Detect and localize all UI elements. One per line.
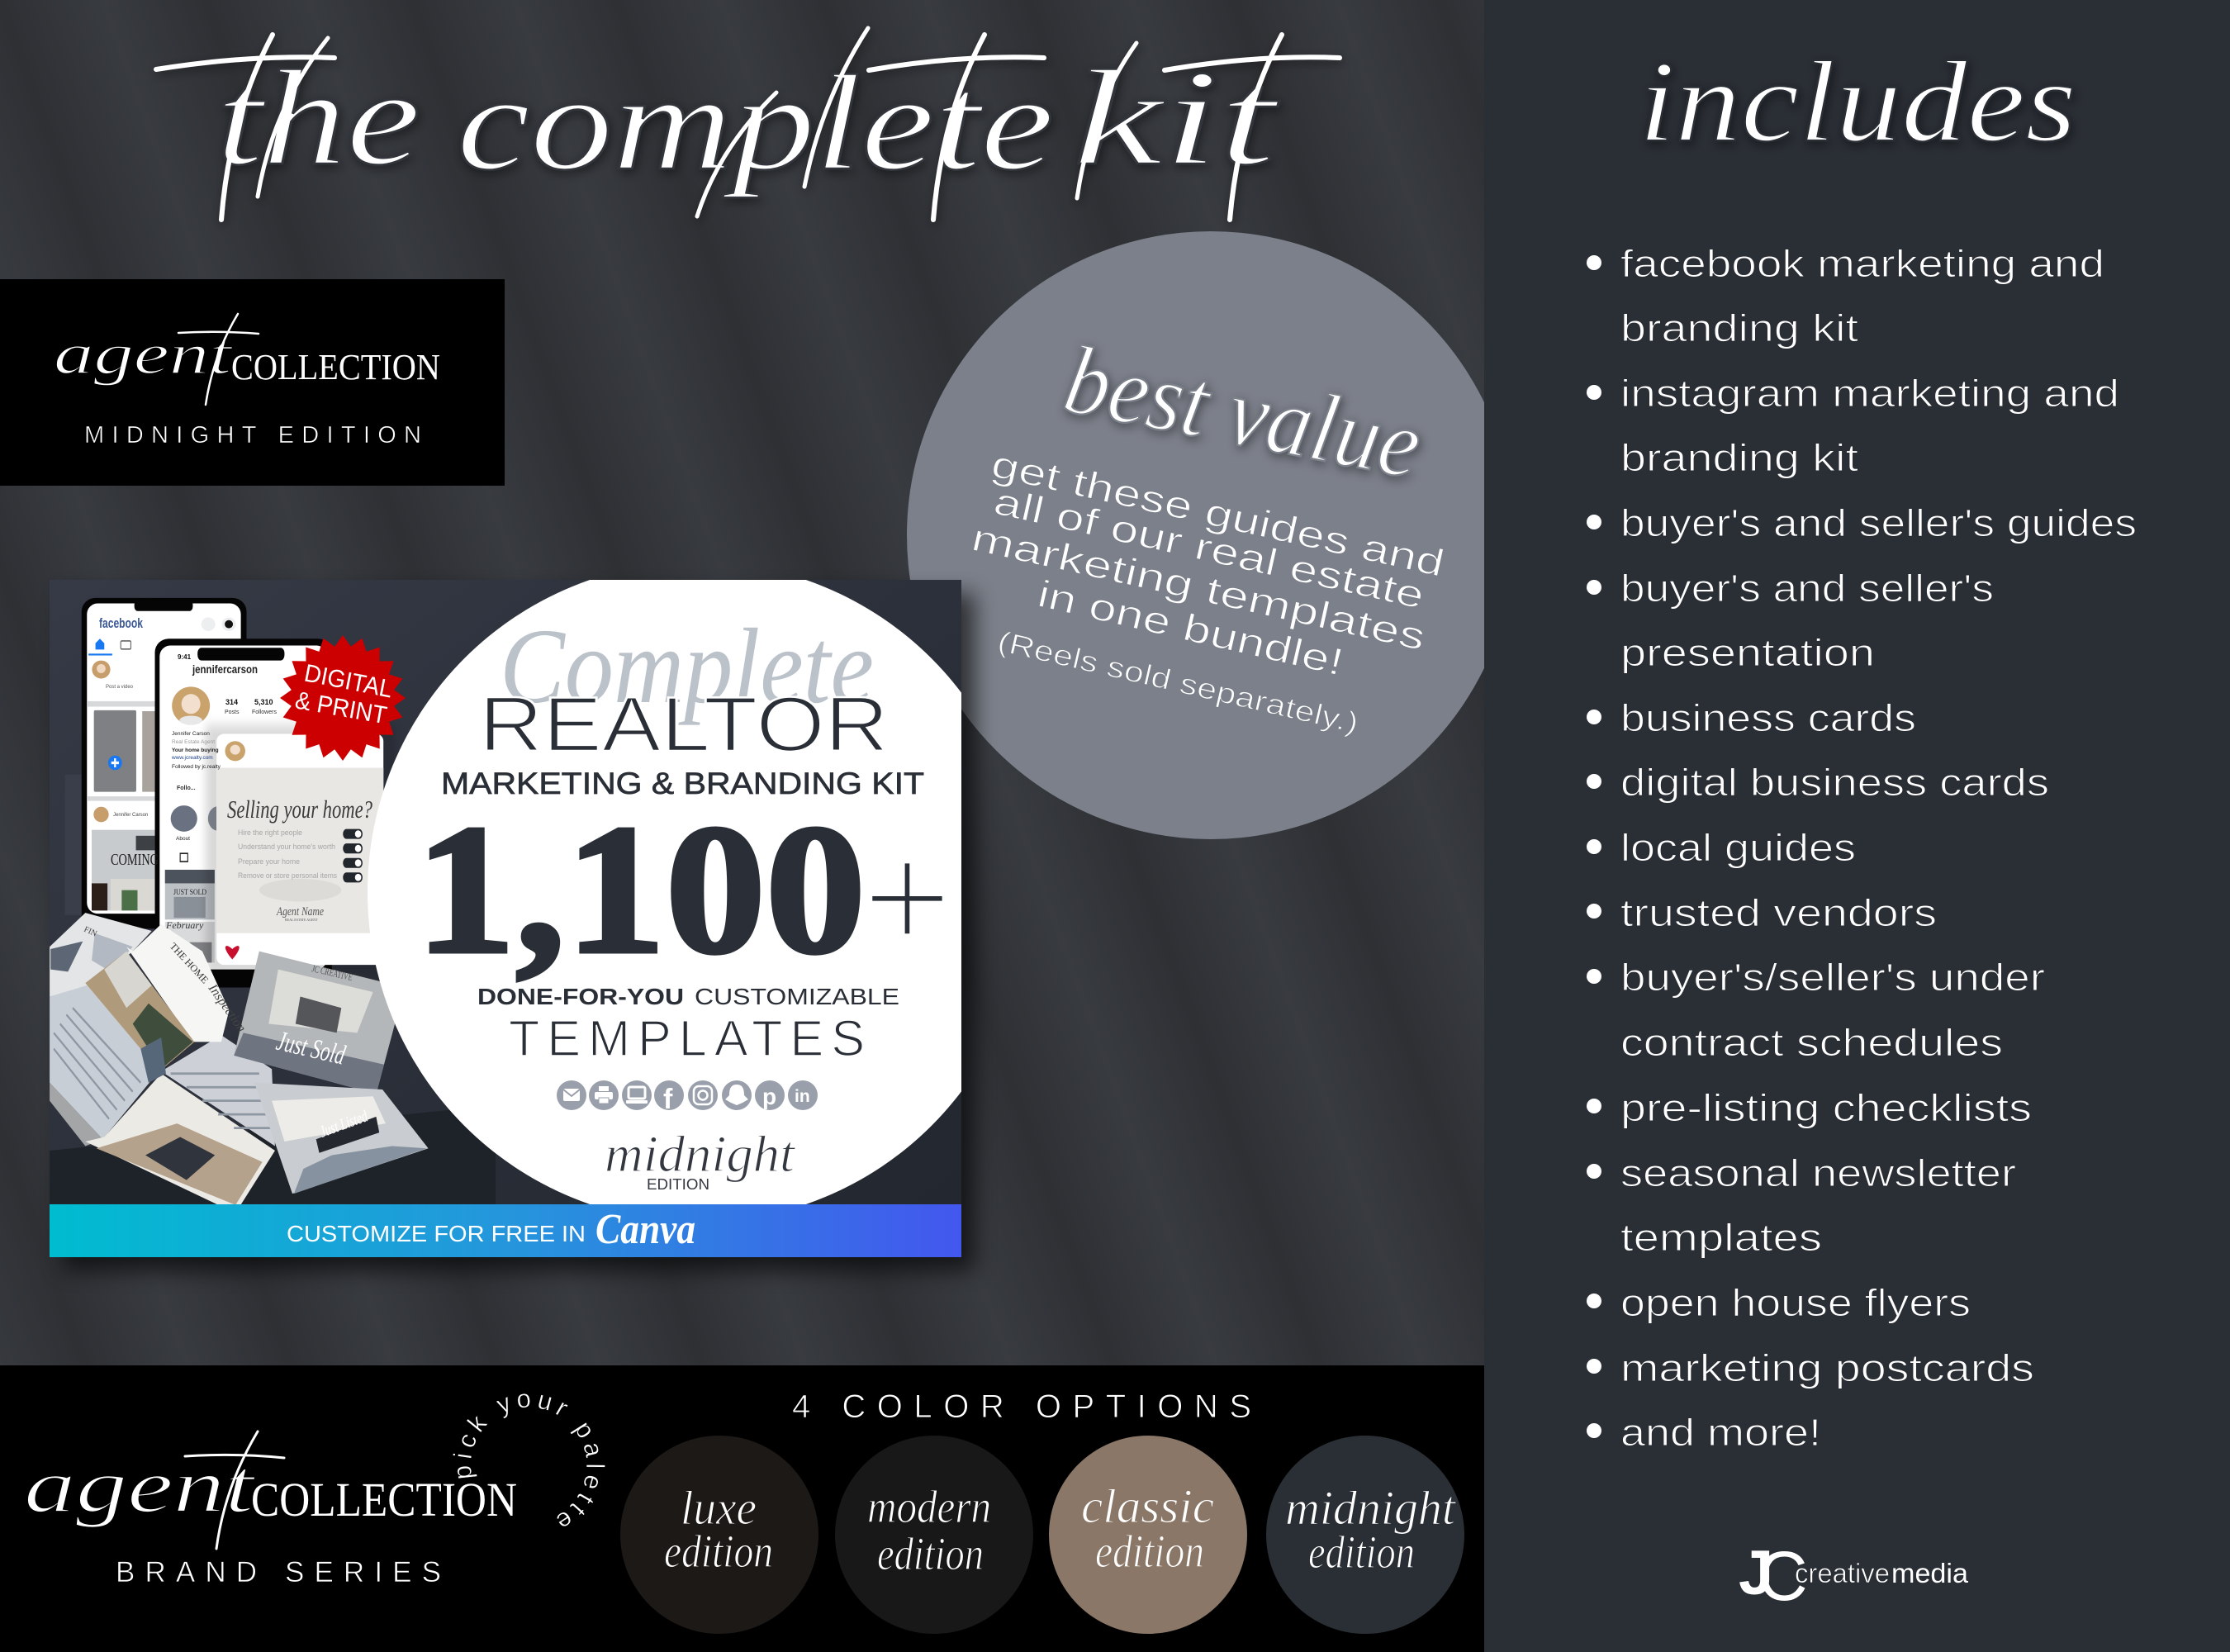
swatch: midnight edition: edition bbox=[1308, 1527, 1415, 1578]
swatch: midnight edition: midnight bbox=[1285, 1481, 1457, 1535]
icon: email bbox=[557, 1080, 586, 1110]
phone and card labels: February bbox=[165, 919, 204, 931]
bullet list: facebook marketing and bbox=[1620, 242, 2104, 285]
phone and card labels: Jennifer Carson bbox=[172, 731, 210, 737]
phone and card labels: Just Listed bbox=[317, 1107, 371, 1142]
icon: pinterest bbox=[755, 1080, 785, 1110]
icon row: channels bbox=[557, 1080, 818, 1115]
badge: digital and print: DIGITAL bbox=[302, 659, 395, 703]
subheading: marketing and branding kit: MARKETING & BRANDING KIT bbox=[441, 767, 924, 800]
curved text: pick your palette: pick your palette bbox=[453, 1393, 605, 1526]
icon: linkedin: in bbox=[795, 1087, 810, 1106]
phone and card labels: Agent Name bbox=[276, 905, 324, 919]
callout heading: best value: best value bbox=[1056, 325, 1430, 500]
title: the complete kit: the bbox=[216, 42, 420, 193]
logo panel: agent collection midnight edition bbox=[0, 279, 505, 486]
bullet list: buyer's and seller's guides bbox=[1620, 501, 2137, 544]
callout body text bbox=[968, 442, 1449, 739]
logo panel: agent collection midnight edition: COLLECTION bbox=[231, 347, 440, 387]
icon: pinterest: p bbox=[762, 1084, 776, 1109]
phone and card labels: Posts bbox=[225, 710, 240, 715]
icon: laptop bbox=[622, 1080, 652, 1110]
bullet list: instagram marketing and bbox=[1620, 372, 2119, 415]
logo panel: agent collection midnight edition: agent bbox=[54, 323, 233, 387]
phone and card labels: 9:41 bbox=[178, 653, 192, 661]
bullet list: branding kit bbox=[1620, 436, 1858, 479]
post card with soft shadow bbox=[206, 724, 395, 979]
icon: facebook: f bbox=[663, 1084, 673, 1115]
phone and card labels bbox=[83, 615, 372, 1142]
main background with diagonal stripes bbox=[0, 0, 1487, 1652]
swatch: luxe edition: luxe bbox=[681, 1481, 757, 1535]
book mockup bbox=[50, 913, 275, 1213]
phone and card labels: JC CREATIVE bbox=[311, 962, 353, 983]
logo: jc creativemedia: J bbox=[1739, 1538, 1773, 1608]
phone and card labels: COMING bbox=[111, 851, 159, 869]
phone 1 body and screen bbox=[82, 598, 247, 928]
phone and card labels: jennifercarson bbox=[192, 662, 258, 676]
logo: jc creativemedia: C bbox=[1758, 1537, 1808, 1615]
bullet list: buyer's and seller's bbox=[1620, 567, 1994, 610]
phone and card labels: 5,310 bbox=[254, 698, 273, 706]
icon: facebook bbox=[654, 1080, 684, 1115]
bullet list: and more! bbox=[1620, 1411, 1821, 1454]
banner: customize for free in canva bbox=[50, 1204, 961, 1257]
flyers bbox=[234, 952, 429, 1194]
phone and card labels: Followers bbox=[252, 710, 277, 715]
phone and card labels: www.jcrealty.com bbox=[171, 755, 213, 761]
callout body text: get these guides and bbox=[988, 442, 1449, 585]
icon: linkedin bbox=[788, 1080, 818, 1110]
white circle with headline bbox=[368, 580, 961, 1204]
bullet list bbox=[1587, 242, 2137, 1454]
phone and card labels: Follo... bbox=[177, 786, 196, 791]
phone and card labels: Hire the right people bbox=[238, 828, 302, 837]
sidebar panel bbox=[1484, 0, 2230, 1652]
logo: jc creativemedia: creative bbox=[1795, 1558, 1890, 1588]
phone and card labels: Real Estate Agent bbox=[172, 739, 215, 745]
bullet list: local guides bbox=[1620, 826, 1856, 869]
callout body text: marketing templates bbox=[968, 515, 1430, 658]
phone and card labels: REAL ESTATE AGENT bbox=[285, 918, 318, 922]
icon: instagram bbox=[688, 1080, 718, 1110]
banner: customize for free in canva: Canva bbox=[595, 1206, 695, 1253]
phone and card labels: Followed by jc.realty bbox=[172, 764, 221, 770]
bullet list: pre-listing checklists bbox=[1620, 1086, 2032, 1129]
text: templates: TEMPLATES bbox=[509, 1010, 865, 1066]
phone and card labels: Prepare your home bbox=[238, 857, 300, 866]
bullet list: marketing postcards bbox=[1620, 1346, 2034, 1389]
icon: snapchat bbox=[722, 1080, 752, 1110]
phone and card labels: About bbox=[176, 836, 190, 842]
badge: digital and print: & PRINT bbox=[293, 686, 389, 729]
brand series logo: agent bbox=[24, 1444, 256, 1528]
phone and card labels: FIN bbox=[83, 925, 98, 939]
bullet list: seasonal newsletter bbox=[1620, 1151, 2016, 1194]
text: done for you customizable: CUSTOMIZABLE bbox=[695, 984, 899, 1009]
callout: best value circle bbox=[907, 231, 1515, 839]
callout body text: all of our real estate bbox=[990, 479, 1428, 617]
title: the complete kit: kit bbox=[1073, 42, 1280, 193]
swatch: modern edition: modern bbox=[867, 1482, 991, 1533]
bullet list: templates bbox=[1620, 1216, 1822, 1259]
phone and card labels: facebook bbox=[99, 615, 143, 631]
swatch: classic edition: edition bbox=[1095, 1526, 1204, 1578]
title: the complete kit: complete bbox=[457, 47, 1054, 198]
script word: complete: Complete bbox=[500, 607, 874, 726]
swatch: luxe edition: edition bbox=[664, 1526, 773, 1578]
logo: jc creativemedia: media bbox=[1891, 1558, 1969, 1588]
script: midnight edition: midnight bbox=[605, 1127, 796, 1183]
swatch: classic edition: classic bbox=[1081, 1479, 1214, 1533]
phone 2 body and screen bbox=[155, 638, 332, 988]
phone and card labels: Just Sold bbox=[273, 1026, 349, 1071]
brand series logo bbox=[24, 1431, 517, 1588]
bullet list: business cards bbox=[1620, 696, 1916, 739]
swatch: classic edition bbox=[1049, 1436, 1247, 1634]
swatch: modern edition bbox=[835, 1436, 1033, 1634]
heading: realtor: REALTOR bbox=[479, 681, 889, 767]
callout body text: in one bundle! bbox=[1034, 572, 1348, 684]
heading: 4 color options: 4 COLOR OPTIONS bbox=[792, 1389, 1251, 1425]
plus sign: + bbox=[861, 809, 953, 985]
bullet list: buyer's/seller's under bbox=[1620, 956, 2045, 999]
swatch: luxe edition bbox=[620, 1436, 818, 1634]
phone and card labels: Understand your home's worth bbox=[238, 843, 335, 851]
phone and card labels: Inspection bbox=[205, 981, 249, 1035]
title: the complete kit bbox=[156, 28, 1340, 220]
icon: printer bbox=[589, 1080, 619, 1110]
bullet list: branding kit bbox=[1620, 306, 1858, 349]
logo panel: agent collection midnight edition: MIDNIGHT EDITION bbox=[84, 422, 421, 449]
bullet list: open house flyers bbox=[1620, 1281, 1971, 1324]
phone and card labels: Selling your home? bbox=[227, 795, 372, 824]
text: done for you customizable bbox=[477, 984, 899, 1009]
phone and card labels: 314 bbox=[225, 698, 238, 706]
mockups: phones, book and flyers bbox=[50, 598, 496, 1213]
banner: customize for free in canva: CUSTOMIZE FOR FREE IN bbox=[287, 1221, 586, 1246]
logo: jc creativemedia bbox=[1739, 1537, 1969, 1615]
phone and card labels: JUST SOLD bbox=[173, 888, 206, 896]
brand series logo: COLLECTION bbox=[251, 1473, 517, 1526]
swatch: modern edition: edition bbox=[877, 1529, 984, 1580]
phone and card labels: Jennifer Carson bbox=[113, 813, 148, 818]
swatch: midnight edition bbox=[1266, 1436, 1464, 1634]
big number: 1,100: 1,100 bbox=[415, 787, 866, 992]
bullet list: presentation bbox=[1620, 631, 1875, 674]
bullet list: contract schedules bbox=[1620, 1021, 2003, 1064]
product panel shadow bbox=[63, 593, 975, 1270]
bottom black band bbox=[0, 1365, 1484, 1652]
phone and card labels: THE HOME bbox=[168, 940, 211, 985]
brand series logo: BRAND SERIES bbox=[116, 1556, 441, 1588]
phone and card labels: Post a video bbox=[106, 685, 134, 690]
badge: digital and print bbox=[280, 635, 406, 761]
phone and card labels: Your home buying bbox=[172, 748, 219, 753]
callout body text: (Reels sold separately.) bbox=[994, 625, 1362, 739]
heading: includes: includes bbox=[1639, 38, 2076, 166]
phone and card labels: Remove or store personal items bbox=[238, 871, 337, 880]
text: done for you customizable: DONE-FOR-YOU bbox=[477, 984, 684, 1009]
bullet list: trusted vendors bbox=[1620, 891, 1937, 934]
script: midnight edition: EDITION bbox=[647, 1176, 709, 1193]
bullet list: digital business cards bbox=[1620, 761, 2049, 804]
